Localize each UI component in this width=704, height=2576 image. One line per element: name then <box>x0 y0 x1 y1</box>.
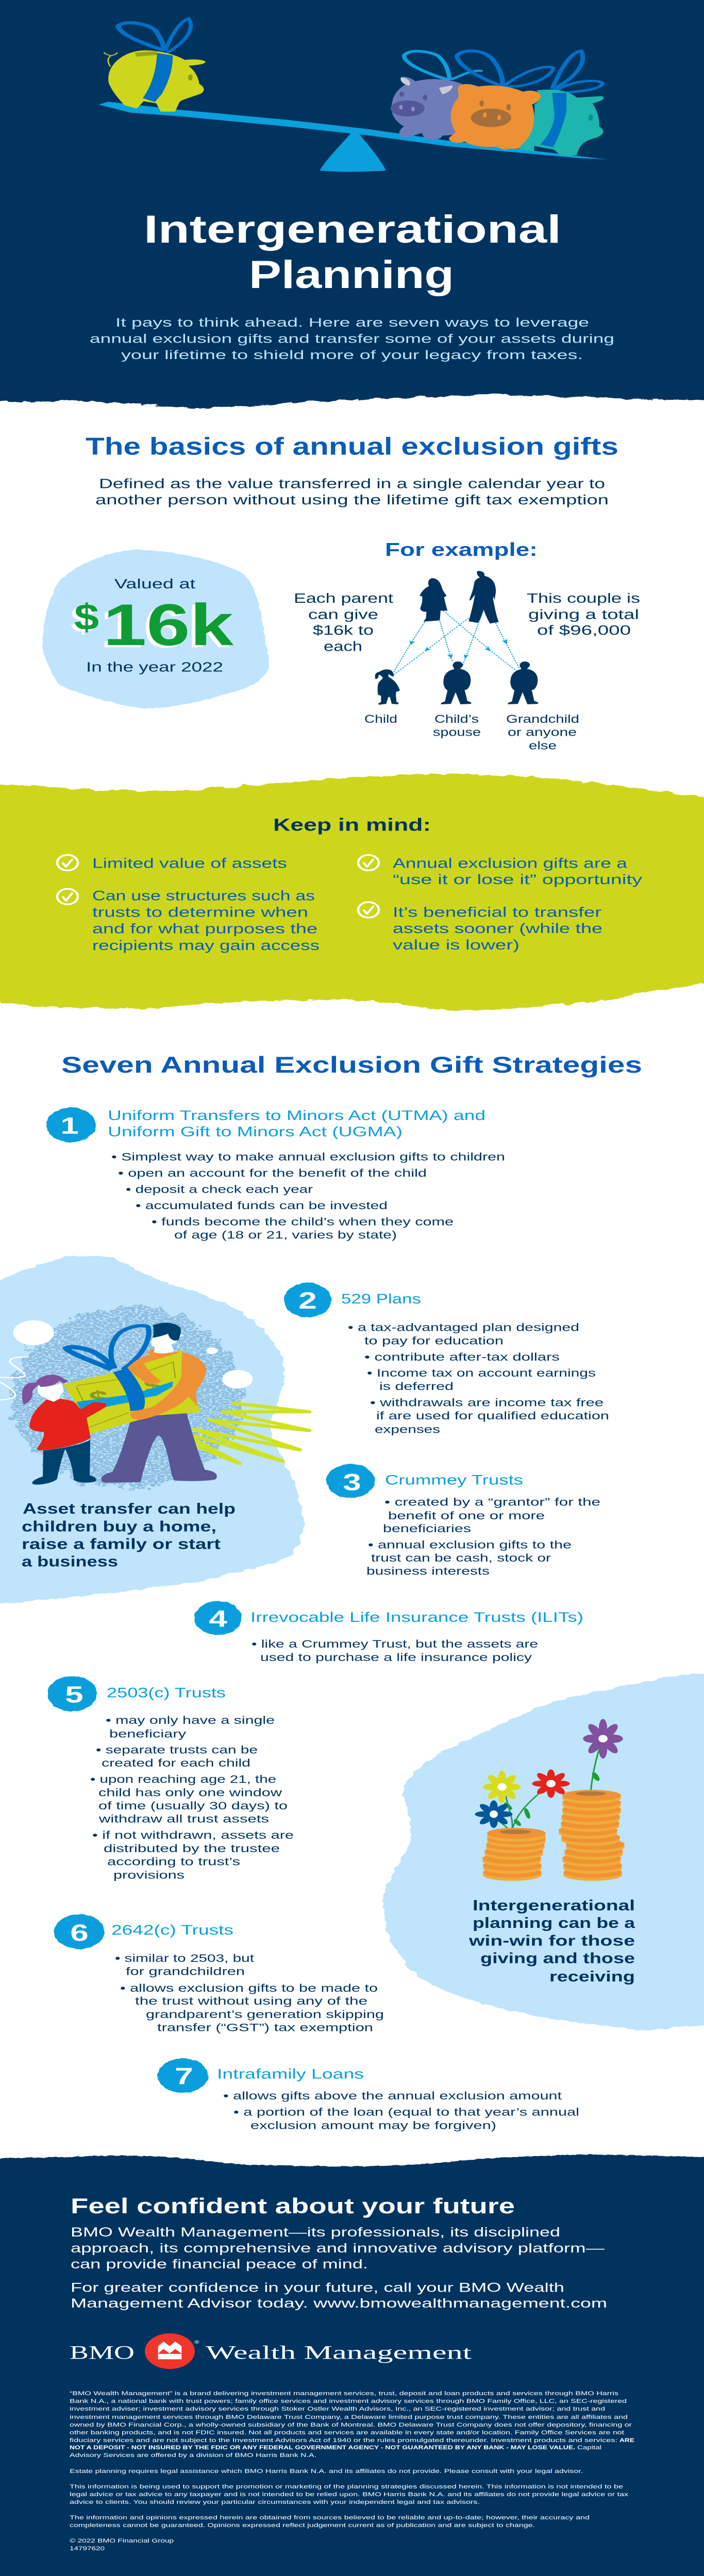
callout: asset transfer: children buy a home, <box>22 1519 216 1535</box>
item: use it or lose it <box>358 855 642 887</box>
text: this couple: giving a total <box>528 607 639 622</box>
logo: BMO Wealth Management <box>70 2333 472 2369</box>
footer body text: can provide financial peace of mind. <box>71 2257 368 2272</box>
year label: In the year 2022 <box>86 660 223 674</box>
number badge 5: 5 <box>65 1682 83 1708</box>
legal disclaimer text: © 2022 BMO Financial Group <box>70 2537 174 2544</box>
number badge 7: 7 <box>175 2063 193 2089</box>
bullets: • contribute after-tax dollars <box>364 1350 560 1363</box>
orange piggy bank <box>449 84 541 149</box>
label: grandchild or anyone else: Grandchild <box>506 713 579 725</box>
text: each parent: $16k to <box>313 623 374 638</box>
legal disclaimer text: fiduciary services and are not subject to the Investment Advisors Act of 1940 or the rules promulgated thereunder. Investment products and services: <box>70 2437 617 2443</box>
item: transfer sooner: It’s beneficial to transfer <box>393 905 601 920</box>
footer body text <box>71 2225 607 2311</box>
footer heading: Feel confident about your future <box>71 2194 515 2218</box>
label: child: Child <box>364 713 397 725</box>
icon: check <box>57 889 78 904</box>
bullets <box>111 1150 505 1241</box>
bullets: to pay for education <box>364 1334 504 1347</box>
label: child's spouse <box>433 713 481 739</box>
diagram: family silhouettes with gift arrows <box>375 571 539 705</box>
legal disclaimer text: Bank N.A., a national bank with trust powers; family office services and investment advisory services through BMO Family Office, LLC, an SEC-registered <box>70 2398 627 2404</box>
gift: money package <box>63 1349 200 1434</box>
bullets <box>223 2089 579 2131</box>
dashed arrows <box>393 610 519 675</box>
heading: Uniform Transfers to Minors Act (UTMA) and <box>108 1108 485 1123</box>
bullets: • similar to 2503, but <box>115 1952 255 1964</box>
callout: asset transfer <box>22 1501 236 1570</box>
strategy 4: ILITs <box>194 1601 583 1664</box>
silhouettes <box>375 571 539 705</box>
bullets: • like a Crummey Trust, but the assets are <box>252 1638 538 1650</box>
definition text: another person without using the lifetime gift tax exemption <box>95 493 609 507</box>
title <box>144 207 561 296</box>
text: this couple: This couple is <box>527 591 640 606</box>
footer body text: For greater confidence in your future, call your BMO Wealth <box>71 2280 564 2295</box>
bullets: of time (usually 30 days) to <box>98 1799 288 1812</box>
legal disclaimer text: other banking products, and is not FDIC insured. Not all products and services are available in every state and/or location. Family Office Services are not <box>70 2429 624 2435</box>
left coin stack <box>482 1828 546 1881</box>
callout: win-win: win-win for those <box>468 1933 635 1949</box>
legal disclaimer text: investment adviser; investment advisory services through Stoker Ostler Wealth Advisors, Inc., an SEC-registered investment advisor; and trust and <box>70 2405 605 2412</box>
bullets: beneficiaries <box>383 1522 471 1535</box>
callout: win-win: giving and those <box>480 1951 635 1967</box>
panel: valued at $16k blob <box>42 550 269 708</box>
label: child's spouse: Child’s <box>434 713 479 725</box>
bullets: • created by a “grantor” for the <box>384 1496 600 1508</box>
item: transfer sooner: assets sooner (while the <box>393 921 602 936</box>
icon: check <box>57 855 78 871</box>
strategy 3: Crummey trusts <box>326 1464 600 1578</box>
icon: BMO roundel <box>145 2333 195 2369</box>
title: Intergenerational <box>144 207 561 251</box>
seesaw plank <box>99 102 607 159</box>
legal disclaimer text: “BMO Wealth Management” is a brand delivering investment management services, trust, deposit and loan products and services through BMO Harris <box>70 2390 619 2397</box>
strategy 1: UTMA / UGMA <box>46 1108 505 1241</box>
item: use it or lose it: “use it or lose it” opportunity <box>393 872 642 887</box>
definition text <box>95 477 609 507</box>
heading: 529 Plans <box>341 1291 421 1307</box>
icon: check <box>358 855 379 871</box>
number badge 4: 4 <box>209 1605 227 1632</box>
bullets: trust can be cash, stock or <box>371 1551 551 1564</box>
intro text: annual exclusion gifts and transfer some of your assets during <box>90 332 614 346</box>
heading: Intrafamily Loans <box>217 2066 364 2081</box>
bullets <box>252 1638 538 1664</box>
legal disclaimer text: ARE <box>619 2437 634 2443</box>
bullets: withdraw all trust assets <box>98 1812 269 1825</box>
bullets <box>366 1496 600 1578</box>
white circles <box>13 1320 253 1388</box>
footer body text: Management Advisor today. www.bmowealthmanagement.com <box>71 2296 607 2311</box>
title: Planning <box>249 252 454 296</box>
legal disclaimer text: NOT A DEPOSIT - NOT INSURED BY THE FDIC OR ANY FEDERAL GOVERNMENT AGENCY - NOT GUARANTEED BY ANY BANK - MAY LOSE VALUE. <box>70 2444 575 2451</box>
callout: asset transfer: a business <box>22 1554 118 1570</box>
strategy 6: 2642(c) trusts <box>54 1914 384 2033</box>
bullets: • upon reaching age 21, the <box>90 1773 276 1785</box>
number badge 3: 3 <box>343 1469 361 1495</box>
adult hair <box>153 1323 181 1341</box>
strategy 2: 529 plans <box>284 1283 609 1436</box>
bullets: • funds become the child’s when they come <box>152 1215 454 1228</box>
heading: 2642(c) Trusts <box>111 1922 233 1938</box>
text: each parent: Each parent <box>294 591 393 606</box>
bows on right pigs <box>404 51 602 93</box>
label: grandchild or anyone else: or anyone <box>508 726 577 739</box>
gift: blue ribbon and bow <box>66 1326 149 1411</box>
gift: money package: $ <box>142 1375 164 1397</box>
panel: footer background <box>0 2155 704 2576</box>
legal disclaimer text: The information and opinions expressed herein are obtained from sources believed to be reliable and up-to-date; however, their accuracy and <box>70 2514 590 2520</box>
bullets: • Simplest way to make annual exclusion gifts to children <box>111 1150 505 1163</box>
amount $16k: 16k <box>103 592 234 658</box>
heading: Uniform Gift to Minors Act (UGMA) <box>108 1124 403 1139</box>
illustration: seesaw with piggy banks <box>99 19 607 172</box>
bullets: expenses <box>375 1423 440 1436</box>
text: each parent: can give <box>308 607 378 622</box>
legal disclaimer text: advice to clients. You should review your particular circumstances with your independent legal and tax advisors. <box>70 2499 480 2505</box>
number badge 4 <box>194 1601 242 1635</box>
item: structures: and for what purposes the <box>92 921 317 937</box>
valued at label: Valued at <box>114 577 195 591</box>
adult legs <box>102 1412 217 1483</box>
arrowheads <box>409 639 507 659</box>
bullets: exclusion amount may be forgiven) <box>250 2119 496 2131</box>
bullets: • accumulated funds can be invested <box>136 1199 388 1212</box>
bullets: • may only have a single <box>106 1714 275 1726</box>
bullets: • a tax-advantaged plan designed <box>348 1321 579 1334</box>
bullets: • if not withdrawn, assets are <box>92 1828 294 1841</box>
item: transfer sooner: value is lower) <box>393 937 519 953</box>
number badge 2 <box>284 1283 331 1317</box>
bullets: • annual exclusion gifts to the <box>368 1538 572 1551</box>
item: structures: Can use structures such as <box>92 888 315 903</box>
right coin stack <box>559 1790 625 1881</box>
legal disclaimer text: This information is being used to support the promotion or marketing of the planning strategies discussed herein. This information is not intended to be <box>70 2483 623 2489</box>
callout: asset transfer: raise a family or start <box>22 1536 221 1552</box>
bullets: • withdrawals are income tax free <box>370 1396 604 1409</box>
seesaw base <box>320 133 386 172</box>
item: structures: trusts to determine when <box>92 905 308 920</box>
callout: win-win: receiving <box>549 1969 635 1985</box>
heading: keep in mind: Keep in mind: <box>273 815 431 835</box>
intro text <box>90 316 614 362</box>
footer body text: BMO Wealth Management—its professionals, its disciplined <box>71 2225 560 2240</box>
bullets: beneficiary <box>109 1727 186 1740</box>
panel: header background <box>0 0 704 408</box>
number badge 3 <box>326 1464 375 1498</box>
illustration: adult and child holding gift <box>0 1320 309 1485</box>
number badge 5 <box>47 1676 97 1711</box>
callout: win-win: planning can be a <box>473 1915 635 1931</box>
heading: Irrevocable Life Insurance Trusts (ILITs) <box>250 1609 583 1625</box>
legal disclaimer text: Capital <box>577 2444 601 2451</box>
bullets: grandparent’s generation skipping <box>146 2008 384 2021</box>
number badge 1 <box>46 1108 96 1142</box>
bullets: of age (18 or 21, varies by state) <box>174 1228 397 1241</box>
bullets: transfer (“GST”) tax exemption <box>157 2021 373 2033</box>
bullets: • a portion of the loan (equal to that year’s annual <box>233 2106 579 2119</box>
callout: asset transfer: Asset transfer can help <box>23 1501 236 1517</box>
bullets: • allows exclusion gifts to be made to <box>120 1981 378 1994</box>
icon: check <box>358 902 379 918</box>
adult head <box>151 1334 185 1353</box>
bullets: • open an account for the benefit of the child <box>118 1166 427 1179</box>
flowers <box>475 1719 623 1828</box>
bullets: provisions <box>113 1869 185 1881</box>
bullets <box>348 1321 609 1436</box>
label: grandchild or anyone else <box>506 713 579 752</box>
heading: 2503(c) Trusts <box>107 1685 226 1700</box>
bullets: • Income tax on account earnings <box>367 1367 596 1379</box>
text: this couple: of $96,000 <box>537 623 631 638</box>
child legs <box>32 1440 96 1485</box>
white squiggle <box>0 1357 28 1400</box>
legal disclaimer text: legal advice or tax advice to any taxpayer and is not intended to be relied upon. BMO Harris Bank N.A. and its affiliates do not provide legal advice or tax <box>70 2491 629 2497</box>
bullets <box>115 1952 384 2033</box>
lime scribble <box>172 1403 309 1464</box>
stems and leaves <box>499 1749 600 1832</box>
legal disclaimer text: investment management services through BMO Delaware Trust Company, a Delaware limited purpose trust company. These entities are all affiliates and <box>70 2414 628 2420</box>
item: structures <box>57 888 320 953</box>
number badge 2: 2 <box>298 1287 317 1314</box>
footer body text: approach, its comprehensive and innovative advisory platform— <box>71 2241 605 2256</box>
text: each parent <box>294 591 393 654</box>
legal disclaimer text <box>70 2390 634 2551</box>
child head <box>38 1383 63 1402</box>
number badge 6 <box>54 1914 105 1949</box>
bullets: created for each child <box>102 1756 250 1769</box>
heading <box>108 1108 485 1139</box>
heading: seven strategies: Seven Annual Exclusion Gift Strategies <box>61 1052 642 1078</box>
bullets: for grandchildren <box>126 1965 245 1978</box>
item: limited value: Limited value of assets <box>92 856 287 871</box>
texture: scribble patch <box>10 1307 242 1487</box>
strategy 5: 2503(c) trusts <box>47 1676 294 1881</box>
number badge 1: 1 <box>60 1112 79 1139</box>
amount $16k: 16k <box>99 595 230 660</box>
number badge 6: 6 <box>70 1920 89 1946</box>
adult torso and arms <box>127 1349 206 1420</box>
bullets: • separate trusts can be <box>96 1743 258 1756</box>
intro text: It pays to think ahead. Here are seven ways to leverage <box>115 316 589 330</box>
item: structures: recipients may gain access <box>92 938 320 953</box>
bullets: business interests <box>366 1565 490 1578</box>
bullets: is deferred <box>379 1380 454 1393</box>
legal disclaimer text: completeness cannot be guaranteed. Opinions expressed reflect judgement current as of publication and are subject to change. <box>70 2522 535 2528</box>
bullets: according to trust’s <box>107 1855 240 1868</box>
legal disclaimer text: Estate planning requires legal assistance which BMO Harris Bank N.A. and its affiliates do not provide. Please consult with your legal advisor. <box>70 2468 583 2474</box>
heading: Crummey Trusts <box>385 1472 523 1487</box>
panel: win-win blob <box>383 1668 704 2030</box>
item: transfer sooner <box>358 902 602 953</box>
heading: for example: For example: <box>385 540 538 560</box>
bullets: used to purchase a life insurance policy <box>260 1651 532 1664</box>
gift: money package: $ <box>87 1386 111 1411</box>
legal disclaimer text: Advisory Services are offered by a division of BMO Harris Bank N.A. <box>70 2452 316 2459</box>
text: each parent: each <box>324 639 362 654</box>
logo: BMO Wealth Management: BMO <box>70 2342 135 2363</box>
bullets: • deposit a check each year <box>126 1183 313 1196</box>
child jacket <box>29 1399 106 1450</box>
intro text: your lifetime to shield more of your legacy from taxes. <box>121 348 583 362</box>
bullets: benefit of one or more <box>388 1509 545 1522</box>
label: child's spouse: spouse <box>433 726 481 739</box>
number badge 7 <box>158 2058 208 2093</box>
child hair <box>22 1375 68 1404</box>
lime piggy bank <box>104 19 206 112</box>
bullets: child has only one window <box>98 1786 282 1799</box>
definition text: Defined as the value transferred in a single calendar year to <box>99 477 605 491</box>
label: grandchild or anyone else: else <box>529 739 557 752</box>
bullets <box>90 1714 294 1881</box>
amount $16k: $ <box>71 599 95 640</box>
text: this couple <box>527 591 640 638</box>
teal piggy bank <box>516 90 604 156</box>
amount $16k: $ <box>74 597 99 638</box>
legal disclaimer text: owned by BMO Financial Corp., a wholly-owned subsidiary of the Bank of Montreal. BMO Delaware Trust Company does not offer depository, financing or <box>70 2421 632 2428</box>
strategy 7: intrafamily loans <box>158 2058 579 2131</box>
bullets: if are used for qualified education <box>376 1409 609 1422</box>
gift: cyan ribbon <box>76 1381 173 1409</box>
bullets: • allows gifts above the annual exclusion amount <box>223 2089 562 2102</box>
legal disclaimer text: 14797620 <box>70 2545 105 2551</box>
bullets: distributed by the trustee <box>104 1842 280 1855</box>
item: use it or lose it: Annual exclusion gifts are a <box>393 856 627 871</box>
illustration: coin stacks with flowers <box>475 1719 625 1881</box>
panel: keep in mind band <box>0 774 704 1010</box>
callout: win-win <box>468 1897 635 1985</box>
logo: BMO Wealth Management: ® <box>194 2340 199 2345</box>
heading: basics: The basics of annual exclusion gifts <box>86 433 618 460</box>
purple piggy bank <box>391 77 462 140</box>
bullets: the trust without using any of the <box>135 1994 367 2007</box>
logo: BMO Wealth Management: Wealth Management <box>206 2342 472 2363</box>
callout: win-win: Intergenerational <box>473 1897 635 1913</box>
panel: asset transfer blob <box>0 1255 303 1605</box>
